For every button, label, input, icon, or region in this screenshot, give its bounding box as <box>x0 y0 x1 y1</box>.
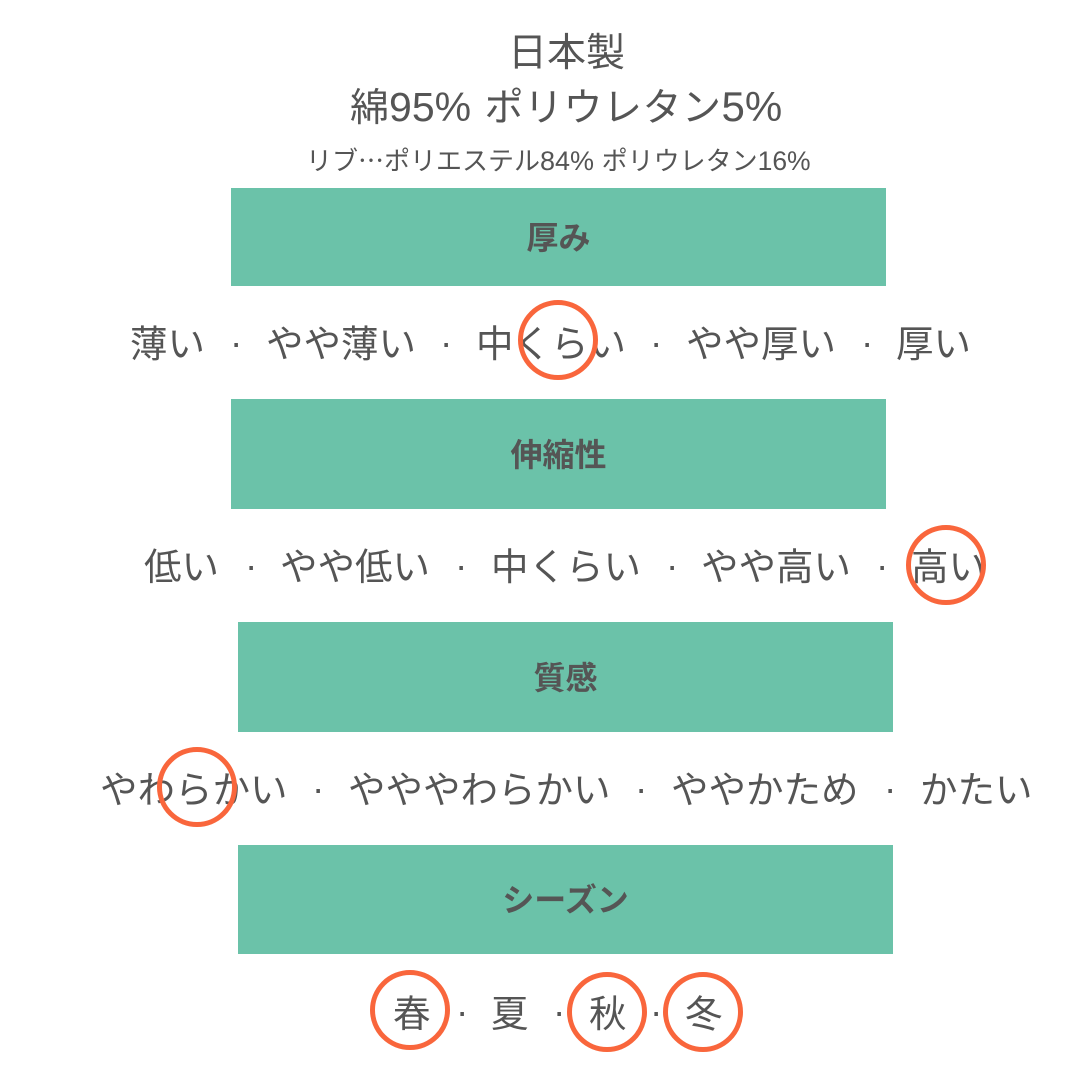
option: spring: 春 <box>393 983 430 1038</box>
marker: selected high <box>906 525 986 605</box>
scale: stretch options <box>144 525 986 605</box>
panel heading: texture: 質感 <box>533 652 598 698</box>
panel heading: season <box>238 845 893 954</box>
text: main material: 綿95% ポリウレタン5% <box>350 77 782 133</box>
title: country of manufacture: 日本製 <box>508 22 625 78</box>
option: dot separator: · <box>312 768 324 809</box>
marker: selected autumn <box>567 972 647 1052</box>
option: slightly high: やや高い <box>701 536 851 591</box>
panel heading: stretch: 伸縮性 <box>510 430 606 476</box>
option: slightly thin: やや薄い <box>266 313 416 368</box>
panel heading: texture <box>238 622 893 732</box>
option: autumn: 秋 <box>589 983 626 1038</box>
text: rib material: リブ…ポリエステル84% ポリウレタン16% <box>306 141 811 178</box>
panel heading: season: シーズン <box>502 875 629 921</box>
option: summer: 夏 <box>491 983 528 1038</box>
marker: selected soft <box>157 747 237 827</box>
option: dot separator: · <box>440 322 452 363</box>
panel heading: stretch <box>231 399 886 509</box>
option: slightly low: やや低い <box>280 536 430 591</box>
option: slightly thick: やや厚い <box>686 313 836 368</box>
option: soft: やわらかい <box>100 759 288 814</box>
option: slightly soft: やややわらかい <box>348 759 610 814</box>
option: dot separator: · <box>861 322 873 363</box>
option: dot separator: · <box>884 768 896 809</box>
option: low: 低い <box>144 536 219 591</box>
option: firm: かたい <box>920 759 1032 814</box>
option: thick: 厚い <box>896 313 971 368</box>
option: dot separator: · <box>876 545 888 586</box>
option: medium: 中くらい <box>491 536 641 591</box>
scale: season options <box>370 970 743 1052</box>
marker: selected winter <box>663 972 743 1052</box>
option: dot separator: · <box>650 991 662 1032</box>
option: dot separator: · <box>455 545 467 586</box>
option: medium: 中くらい <box>476 313 626 368</box>
option: dot separator: · <box>635 768 647 809</box>
panel heading: thickness <box>231 188 886 286</box>
option: high: 高い <box>911 536 986 591</box>
marker: selected medium <box>518 300 598 380</box>
option: slightly firm: ややかため <box>671 759 858 814</box>
option: dot separator: · <box>230 322 242 363</box>
panel heading: thickness: 厚み <box>526 212 590 258</box>
scale: thickness options <box>130 300 971 380</box>
option: winter: 冬 <box>685 983 722 1038</box>
option: thin: 薄い <box>130 313 205 368</box>
option: dot separator: · <box>553 991 565 1032</box>
option: dot separator: · <box>666 545 678 586</box>
scale: texture options <box>100 747 1032 827</box>
option: dot separator: · <box>245 545 257 586</box>
marker: selected spring <box>370 970 450 1050</box>
option: dot separator: · <box>456 991 468 1032</box>
option: dot separator: · <box>650 322 662 363</box>
